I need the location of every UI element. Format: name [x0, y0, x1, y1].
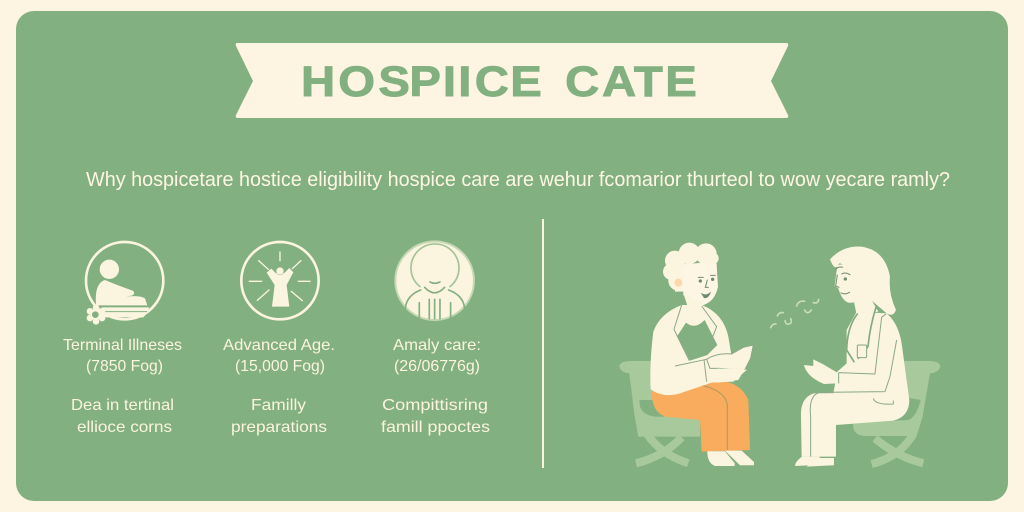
speech marks [771, 299, 819, 328]
legs [652, 381, 750, 452]
chair: left [619, 361, 700, 463]
illustration: patient and nurse talking [619, 243, 940, 467]
legs [801, 393, 893, 457]
head [683, 263, 718, 305]
note: advanced age: preparations [231, 419, 327, 436]
column: terminal illnesses [63, 242, 182, 436]
face [698, 275, 715, 287]
value: family care: (26/06776g) [394, 358, 480, 375]
label: advanced age: Advanced Age. [223, 337, 335, 354]
shoes [795, 457, 820, 466]
hair [830, 246, 896, 315]
torso [833, 312, 909, 421]
chair: right [853, 361, 940, 464]
note: advanced age [231, 397, 327, 436]
icon: resting patient with flower [86, 242, 163, 325]
person: nurse [795, 246, 909, 467]
title: HOSPIICE CATE [301, 57, 697, 106]
column: family care [381, 241, 490, 436]
subtitle question: Why hospicetare hostice eligibility hospice care are wehur fcomarior thurteol to wow yecare ramly? [86, 169, 950, 191]
hair [663, 243, 719, 292]
note: terminal illnesses: ellioce corns [77, 419, 172, 436]
column: advanced age [223, 242, 335, 436]
note: family care: famill ppoctes [381, 419, 490, 436]
label: terminal illnesses: Terminal Illneses [63, 337, 182, 354]
coat lines [810, 314, 897, 457]
value: advanced age: (15,000 Fog) [235, 358, 325, 375]
note: terminal illnesses [71, 397, 174, 436]
note: advanced age: Familly [251, 397, 306, 414]
stethoscope [847, 307, 876, 362]
label: family care: Amaly care: [393, 337, 481, 354]
note: family care: Compittisring [382, 397, 488, 414]
hands [707, 345, 753, 369]
person: patient [650, 243, 754, 466]
value: terminal illnesses: (7850 Fog) [86, 358, 163, 375]
torso and coat [650, 305, 747, 395]
hand [804, 359, 837, 384]
shoes [707, 451, 735, 466]
divider [542, 219, 544, 468]
head [835, 264, 867, 303]
face [830, 257, 846, 267]
icon: person portrait [395, 241, 474, 320]
note: terminal illnesses: Dea in tertinal [71, 397, 174, 414]
title banner [236, 43, 788, 118]
icon: figure with raised arms [241, 242, 319, 319]
note: family care [381, 397, 490, 436]
